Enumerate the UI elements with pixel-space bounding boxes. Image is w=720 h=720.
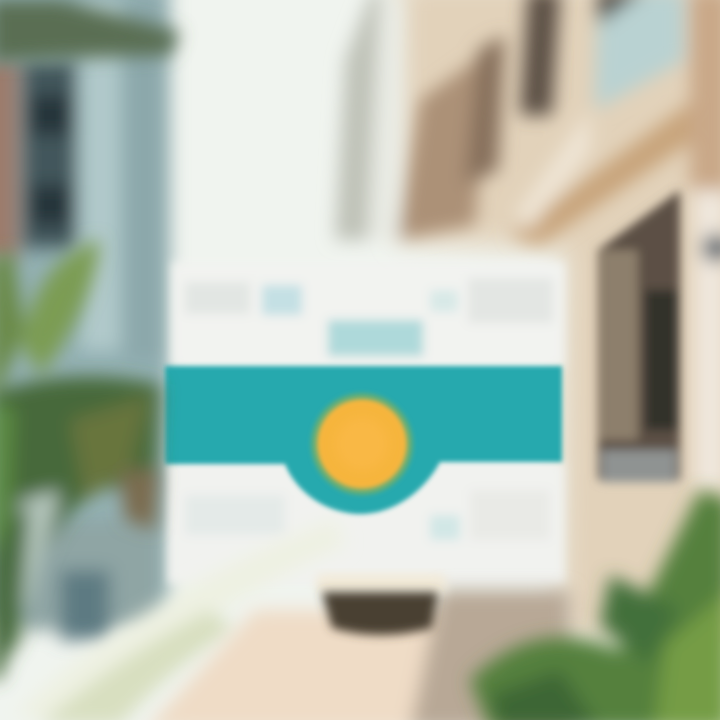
right beige building	[400, 0, 720, 640]
teal banner with bowl	[165, 366, 562, 514]
building facade details	[335, 0, 720, 490]
left glass building	[0, 0, 170, 640]
white palm stem diagonal	[15, 520, 345, 720]
left green leaves	[0, 240, 160, 680]
sign panel lower white area	[168, 462, 564, 584]
sun icon	[311, 393, 413, 495]
dark bench object	[316, 574, 446, 635]
sign panel upper white area	[172, 262, 564, 367]
palm fronds at top left	[0, 0, 180, 62]
right green plants	[470, 490, 720, 720]
dark building entrance	[598, 190, 680, 482]
pavement	[145, 590, 570, 720]
